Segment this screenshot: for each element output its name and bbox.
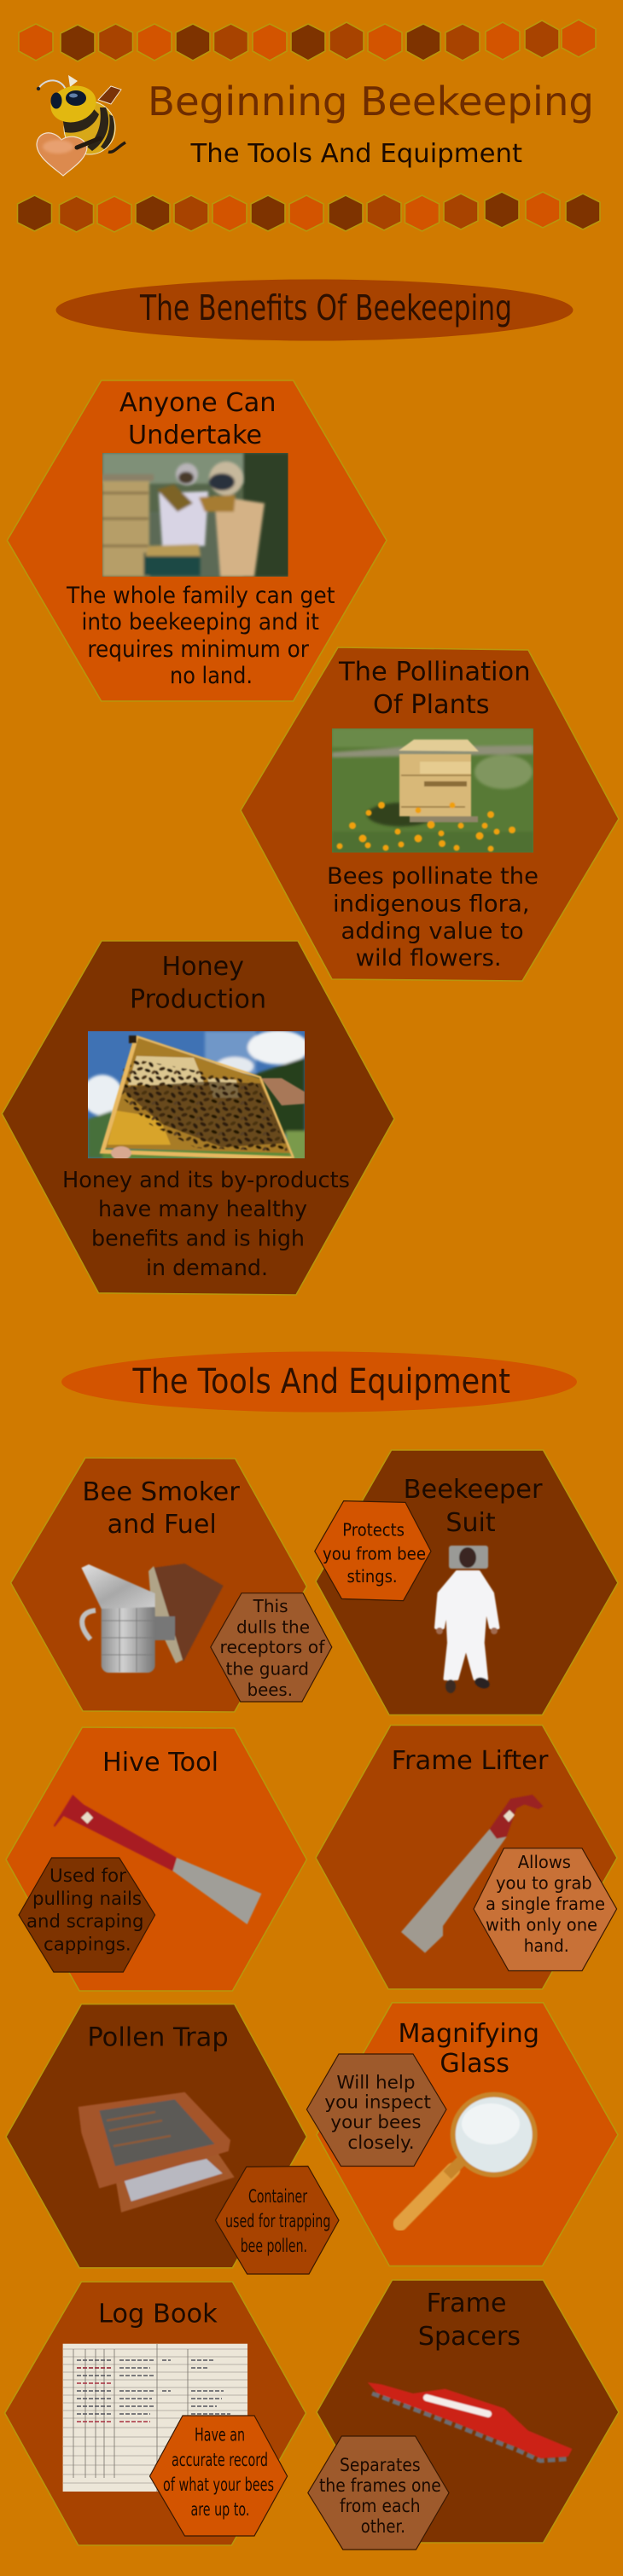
body text: wild flowers. [356, 945, 502, 972]
heading: Of Plants [373, 690, 490, 720]
callout: and scraping [26, 1912, 143, 1932]
heading [119, 388, 277, 450]
callout [315, 1501, 431, 1601]
callout: of what your bees [163, 2474, 274, 2495]
callout [215, 2167, 339, 2274]
bottom honeycomb row [17, 192, 600, 232]
callout: with only one [486, 1915, 597, 1935]
heading: Log Book [98, 2300, 218, 2329]
body text: Bees pollinate the [327, 863, 539, 890]
panel: Anyone Can Undertake [7, 380, 387, 701]
panel: The Pollination Of Plants [241, 647, 619, 981]
banner: The Tools And Equipment: The Tools And Equipment [132, 1362, 510, 1401]
heading: Production [130, 985, 266, 1015]
callout: from each [340, 2496, 421, 2516]
body text: into beekeeping and it [82, 609, 319, 635]
icon: hive tool [54, 1795, 261, 1924]
callout: This [253, 1596, 288, 1616]
subtitle: The Tools And Equipment [189, 139, 522, 169]
body text: Honey and its by-products [62, 1168, 350, 1193]
callout [19, 1858, 155, 1972]
callout: the frames one [319, 2475, 441, 2496]
heading: Honey [162, 952, 244, 982]
banner: The Tools And Equipment [61, 1351, 577, 1413]
wing [98, 86, 121, 104]
body text: benefits and is high [91, 1227, 305, 1252]
photo: frame covered with bees [82, 1030, 309, 1160]
callout: Will help [336, 2072, 416, 2092]
heading: Frame Lifter [392, 1746, 549, 1776]
callout: are up to. [191, 2499, 249, 2520]
callout: you from bee [323, 1543, 426, 1564]
callout: Have an [195, 2425, 245, 2445]
callout: your bees [330, 2112, 422, 2132]
callout: used for trapping [225, 2211, 330, 2231]
heading: Glass [440, 2049, 509, 2079]
body text [62, 1168, 350, 1281]
heart [37, 133, 87, 176]
callout: bees. [247, 1680, 293, 1700]
callout [474, 1848, 617, 1970]
body text: in demand. [146, 1256, 268, 1281]
heading: Beekeeper [404, 1475, 543, 1505]
icon: frame lifter [401, 1795, 543, 1953]
panel: Frame Spacers [308, 2280, 619, 2550]
heading: Suit [445, 1508, 496, 1538]
head [46, 81, 101, 127]
heading: and Fuel [108, 1510, 217, 1540]
heading: Magnifying [398, 2019, 539, 2049]
heading: Anyone Can [119, 388, 277, 418]
callout: hand. [524, 1935, 569, 1956]
callout [308, 2436, 449, 2550]
banner: The Benefits Of Beekeeping: The Benefits Of Beekeeping [139, 287, 512, 328]
panel: Pollen Trap [6, 2005, 339, 2274]
body text [66, 583, 335, 689]
body text: no land. [170, 663, 253, 689]
icon: smoker [81, 1564, 224, 1673]
callout: bee pollen. [241, 2236, 307, 2256]
callout: Container [248, 2186, 307, 2207]
photo: hive in a meadow [332, 728, 533, 853]
callout: Used for [49, 1865, 126, 1886]
callout: the guard [225, 1659, 309, 1680]
panel: Frame Lifter [316, 1725, 617, 1989]
callout: pulling nails [32, 1888, 142, 1909]
callout: cappings. [44, 1934, 131, 1954]
callout: dulls the [236, 1617, 310, 1638]
callout: other. [361, 2516, 405, 2537]
body text: The whole family can get [66, 583, 335, 609]
callout: receptors of [220, 1637, 325, 1657]
eyes [51, 92, 61, 109]
callout: Protects [342, 1520, 405, 1540]
heading [404, 1475, 543, 1538]
heading: Pollen Trap [87, 2023, 229, 2052]
panel: Log Book [5, 2282, 306, 2545]
title: Beginning Beekeeping [148, 78, 594, 125]
callout: stings. [346, 1566, 398, 1587]
heading: Spacers [418, 2322, 521, 2352]
heading [398, 2019, 539, 2079]
heading [338, 657, 531, 720]
heading: The Pollination [338, 657, 531, 688]
panel: Magnifying Glass [306, 2003, 618, 2266]
heading [82, 1477, 240, 1540]
icon: open log book [63, 2344, 247, 2492]
panel: Honey Production [2, 941, 394, 1295]
icon: frame spacer [368, 2382, 572, 2461]
heading: Hive Tool [102, 1748, 218, 1778]
callout: a single frame [486, 1894, 605, 1914]
icon: bee suit [436, 1546, 498, 1693]
arm and legs [77, 138, 100, 148]
body text: have many healthy [98, 1197, 307, 1222]
icon: magnifying glass [400, 2092, 538, 2224]
body text [327, 863, 539, 972]
heading [130, 952, 266, 1015]
panel: Beekeeper Suit [315, 1450, 618, 1714]
collar [62, 109, 99, 133]
icon: pollen trap [79, 2092, 235, 2213]
banner: The Benefits Of Beekeeping [56, 280, 574, 341]
heading [418, 2289, 521, 2352]
callout [306, 2054, 446, 2167]
callout: you inspect [324, 2092, 431, 2112]
callout: Allows [518, 1852, 571, 1872]
body [64, 102, 115, 154]
heading: Undertake [128, 421, 262, 450]
icon: bee holding a heart [37, 75, 125, 176]
heading: Bee Smoker [82, 1477, 240, 1507]
heading: Frame [427, 2289, 507, 2318]
body text: adding value to [341, 918, 524, 945]
callout [150, 2416, 288, 2536]
callout: accurate record [172, 2450, 268, 2470]
callout [211, 1593, 332, 1702]
callout: closely. [347, 2132, 415, 2153]
panel: Hive Tool [6, 1727, 306, 1991]
body text: indigenous flora, [333, 891, 530, 917]
top honeycomb row [19, 20, 596, 61]
antennae [38, 80, 66, 90]
body text: requires minimum or [87, 636, 310, 663]
callout: you to grab [496, 1873, 592, 1894]
panel: Bee Smoker and Fuel [11, 1458, 332, 1712]
photo: two beekeepers [102, 453, 290, 577]
callout: Separates [340, 2455, 421, 2475]
